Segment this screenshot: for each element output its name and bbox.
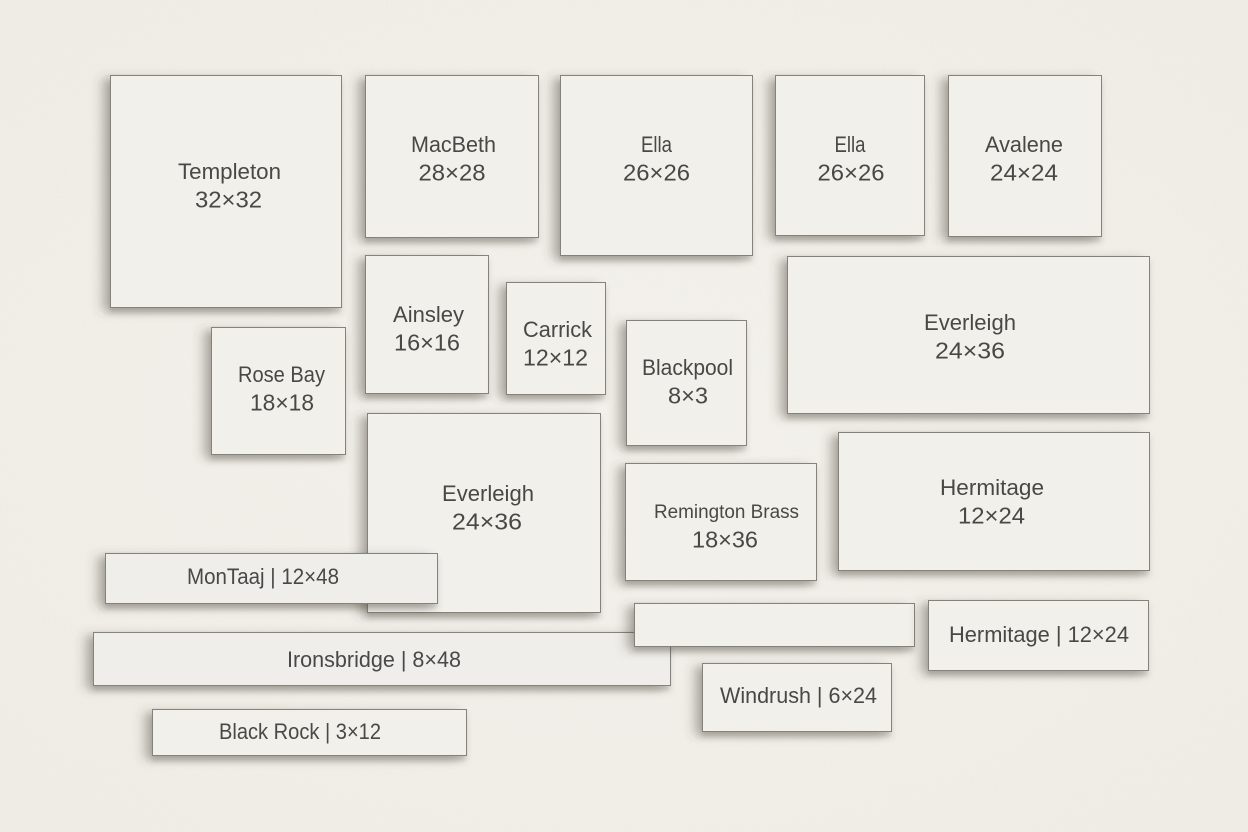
panel: Ironsbridge 8x48 [94, 632, 670, 686]
panel: Ella 26x26 second: 26×26 [818, 160, 884, 186]
panel: Ainsley 16x16: 16×16 [394, 330, 460, 356]
panel: MonTaaj 12x48 [106, 554, 438, 604]
panel: Everleigh 24x36 center: Everleigh [442, 481, 534, 506]
panel: Ella 26x26: 26×26 [623, 160, 690, 186]
panel: Hermitage 12x24 small: Hermitage | 12×24 [949, 622, 1129, 647]
panel: Avalene 24x24: 24×24 [990, 160, 1058, 186]
panel: Windrush 6x24 [702, 664, 892, 732]
panel: Rose Bay 18x18: Rose Bay [238, 362, 325, 387]
panel: Ainsley 16x16 [366, 256, 488, 394]
panel: Blackpool 8x3: 8×3 [668, 382, 708, 408]
panel: Everleigh 24x36 right: 24×36 [935, 338, 1005, 364]
panel: Hermitage 12x24 large: Hermitage [940, 475, 1044, 500]
panel: Black Rock 3x12 [152, 710, 466, 756]
panel: Ironsbridge 8x48: Ironsbridge | 8×48 [287, 647, 461, 672]
panel: Everleigh 24x36 right: Everleigh [924, 310, 1016, 335]
panel: Everleigh 24x36 right [788, 256, 1150, 414]
panel: Templeton 32x32: 32×32 [195, 186, 262, 212]
panel: Ella 26x26 second [776, 76, 924, 236]
panel: Hermitage 12x24 large [838, 432, 1150, 570]
panel: MacBeth 28x28: MacBeth [411, 132, 496, 157]
panel: Avalene 24x24: Avalene [985, 132, 1063, 157]
panel: Rose Bay 18x18: 18×18 [250, 390, 314, 416]
panel: Templeton 32x32: Templeton [178, 159, 281, 184]
panel: Rose Bay 18x18 [212, 328, 346, 454]
panel: Everleigh 24x36 center: 24×36 [452, 508, 522, 534]
panel: Ainsley 16x16: Ainsley [393, 302, 464, 327]
panel: Templeton 32x32 [110, 76, 342, 308]
panel: Ella 26x26 [560, 76, 752, 256]
panel: Hermitage 12x24 large: 12×24 [958, 502, 1025, 528]
panel: MonTaaj 12x48: MonTaaj | 12×48 [187, 564, 339, 589]
panel: Blackpool 8x3: Blackpool [642, 355, 733, 380]
panel: MacBeth 28x28 [366, 76, 538, 238]
panel: Carrick 12x12: 12×12 [523, 344, 588, 370]
panel: Carrick 12x12 [506, 282, 606, 394]
panel: Ella 26x26 second: Ella [834, 132, 866, 157]
panel: Carrick 12x12: Carrick [523, 317, 593, 342]
panel: Black Rock 3x12: Black Rock | 3×12 [219, 719, 381, 744]
panel: Remington Brass 18x36: 18×36 [692, 526, 758, 552]
panel: Remington Brass 18x36: Remington Brass [654, 502, 799, 523]
panel: unlabeled blank strip [634, 604, 914, 646]
panel: MacBeth 28x28: 28×28 [418, 160, 486, 186]
panel: Ella 26x26: Ella [641, 132, 673, 157]
panel: Everleigh 24x36 center [368, 414, 600, 612]
panel: Remington Brass 18x36 [626, 464, 816, 580]
panel: Hermitage 12x24 small [928, 600, 1148, 670]
panel: Windrush 6x24: Windrush | 6×24 [720, 683, 877, 708]
panel: Blackpool 8x3 [626, 320, 746, 446]
panel: Avalene 24x24 [948, 76, 1102, 236]
